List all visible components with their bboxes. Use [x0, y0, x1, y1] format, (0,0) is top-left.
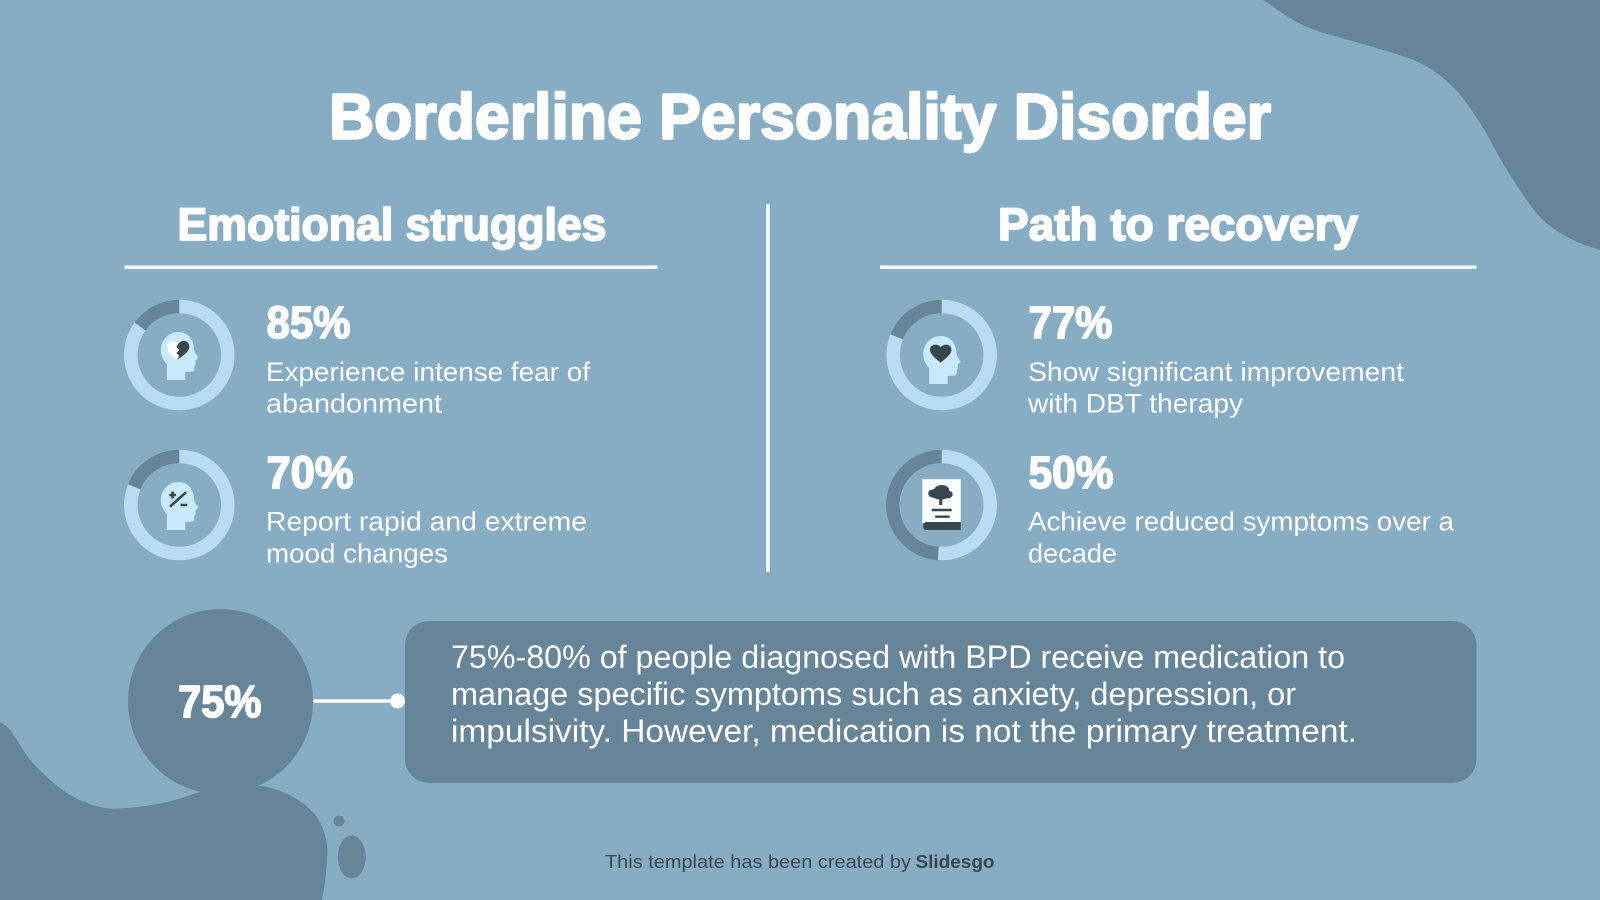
stat: 77%: 77% [1028, 297, 1112, 348]
panel: path to recovery [880, 199, 1476, 568]
connector arrow [314, 694, 405, 708]
blob: top right [1263, 0, 1600, 250]
text: DBT therapy: Show significant improvement [1028, 357, 1405, 387]
blob: bottom left [0, 722, 327, 900]
text: reduced symptoms: Achieve reduced symptoms over a [1028, 506, 1455, 536]
donut: 77% [893, 306, 990, 404]
footer credit: This template has been created by [605, 852, 911, 872]
callout box: medication: impulsivity. However, medication is not the primary treatment. [451, 713, 1357, 749]
donut: 70% [131, 456, 228, 554]
text: mood changes [266, 506, 587, 568]
text: reduced symptoms [1028, 506, 1455, 568]
callout circle: 75% [128, 609, 313, 794]
icon: head with broken heart [161, 332, 198, 380]
text: mood changes: Report rapid and extreme [266, 506, 587, 536]
text: fear of abandonment [266, 357, 591, 418]
icon: book with tree [922, 479, 961, 530]
donut: 50% [893, 456, 990, 554]
text: fear of abandonment: abandonment [266, 388, 443, 418]
icon: head with plus minus [161, 482, 198, 530]
callout circle: 75%: 75% [178, 676, 262, 727]
stat: 85%: 85% [266, 297, 350, 348]
callout box: medication: manage specific symptoms such as anxiety, depression, or [451, 676, 1296, 712]
footer credit: Slidesgo [916, 852, 995, 872]
text: DBT therapy: with DBT therapy [1027, 388, 1244, 418]
panel: emotional struggles [124, 199, 658, 568]
callout box: medication: 75%-80% of people diagnosed with BPD receive medication to [451, 639, 1345, 675]
blob: oval dot [338, 836, 366, 878]
stat: 50%: 50% [1028, 447, 1114, 498]
text: DBT therapy [1027, 357, 1405, 418]
text: fear of abandonment: Experience intense fear of [266, 357, 591, 387]
heading: emotional struggles: Emotional struggles [178, 199, 606, 250]
text: reduced symptoms: decade [1028, 538, 1117, 568]
donut: 85% [131, 306, 228, 404]
title: Borderline Personality Disorder [329, 80, 1271, 152]
blob: small dot [334, 816, 344, 826]
text: mood changes: mood changes [266, 538, 448, 568]
callout box: medication [405, 621, 1476, 783]
heading: path to recovery: Path to recovery [998, 199, 1358, 250]
icon: head with heart [923, 336, 961, 384]
stat: 70%: 70% [266, 447, 354, 498]
